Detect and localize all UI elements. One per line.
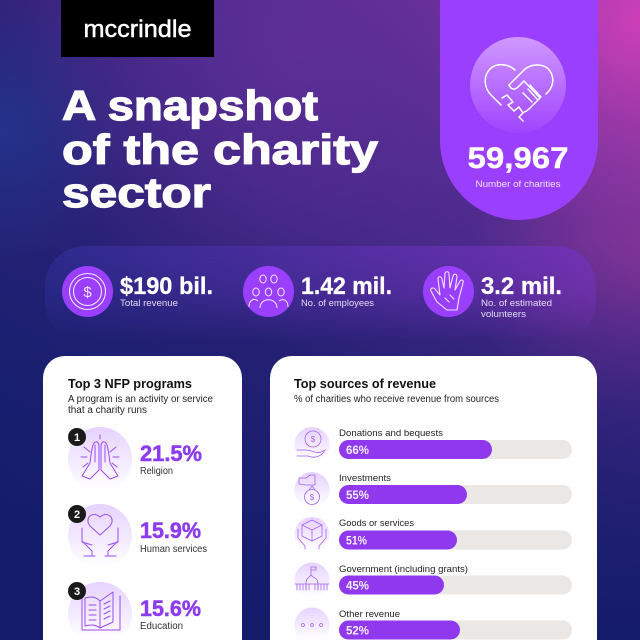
bar: donations and bequests — [294, 427, 572, 462]
stat: employees — [243, 266, 392, 317]
text: program definition: that a charity runs — [68, 405, 147, 416]
panel: number of charities — [440, 0, 598, 220]
program 1: religion: 1 — [74, 432, 80, 444]
program 3: education: 3 — [74, 586, 80, 598]
stat: volunteers: 3.2 mil. — [481, 273, 562, 300]
program 2: human services: 15.9% — [140, 518, 201, 543]
heading: top 3 NFP programs: Top 3 NFP programs — [68, 377, 192, 391]
title: of the charity — [62, 126, 379, 173]
text: revenue subtitle: % of charities who receive revenue from sources — [294, 394, 499, 405]
bar: goods or services: 51% — [346, 536, 367, 548]
panel: top 3 NFP programs — [43, 356, 242, 640]
stat: employees: 1.42 mil. — [301, 273, 392, 300]
panel: key stats band — [45, 246, 596, 328]
text: program definition — [68, 394, 214, 416]
stat: total revenue — [62, 266, 213, 317]
program 3: education — [68, 582, 201, 640]
stat: 59,967: 59,967 — [468, 142, 568, 175]
bar: goods or services — [294, 517, 572, 552]
stat: employees: No. of employees — [301, 298, 374, 309]
bar: government: Government (including grants) — [339, 564, 468, 575]
bar: other revenue — [294, 607, 572, 640]
program 2: human services: Human services — [140, 544, 207, 555]
bar: goods or services: Goods or services — [339, 518, 414, 529]
program 2: human services — [68, 504, 207, 568]
program 1: religion: 21.5% — [140, 441, 202, 466]
title: sector — [62, 169, 211, 216]
bar: donations and bequests: 66% — [346, 445, 369, 457]
stat: total revenue: Total revenue — [120, 298, 178, 309]
icon: heart handshake — [470, 37, 566, 133]
label: number of charities: Number of charities — [476, 179, 561, 190]
program 1: religion — [68, 427, 202, 491]
panel: top sources of revenue — [270, 356, 597, 640]
bar: donations and bequests: $ — [311, 435, 316, 444]
stat: total revenue: $ — [83, 284, 92, 301]
bar: investments: Investments — [339, 473, 391, 484]
text: program definition: A program is an activity or service — [68, 394, 214, 405]
bar: other revenue: Other revenue — [339, 609, 400, 620]
program 2: human services: 2 — [74, 509, 80, 521]
title: A snapshot — [62, 82, 318, 129]
program 3: education: 15.6% — [140, 596, 201, 621]
title — [62, 82, 379, 216]
bar: government: 45% — [346, 580, 369, 592]
stat: volunteers: volunteers — [481, 309, 526, 320]
program 1: religion: Religion — [140, 466, 173, 477]
bar: donations and bequests: Donations and bequests — [339, 428, 443, 439]
bar: government — [294, 562, 572, 598]
bar: investments: $ — [310, 493, 315, 502]
heading: top sources of revenue: Top sources of revenue — [294, 377, 436, 391]
bar: other revenue: 52% — [346, 626, 369, 638]
stat: volunteers — [423, 266, 562, 320]
logo: mccrindle — [84, 16, 192, 43]
program 3: education: Education — [140, 621, 183, 632]
stat: volunteers: No. of estimated — [481, 298, 552, 309]
bar: investments — [294, 472, 572, 507]
stat: total revenue: $190 bil. — [120, 273, 213, 300]
bar: investments: 55% — [346, 490, 369, 502]
logo — [61, 0, 214, 57]
